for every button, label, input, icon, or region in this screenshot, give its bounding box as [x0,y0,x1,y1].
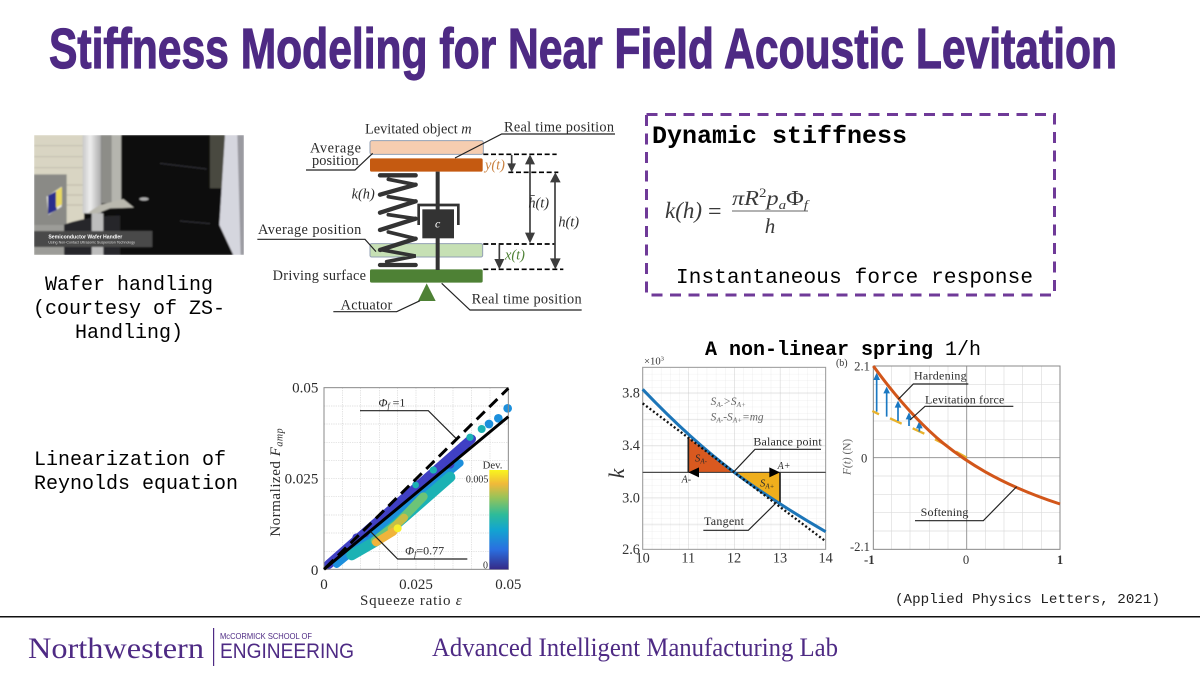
annotations: Balance point [753,434,822,448]
footer logo: Northwestern Engineering [28,628,354,666]
axis labels: 3.0 [622,490,640,506]
spring [380,175,416,265]
diagram labels: x(t) [504,247,525,263]
axis labels: 3.8 [622,385,640,401]
diagram labels: Average position [258,222,361,238]
caption: wafer handling: (courtesy of ZS- [33,298,225,321]
axis labels [604,356,833,566]
axis labels: 0.025 [285,472,318,488]
diagram labels: h(t) [558,215,579,231]
leader lines [257,134,615,312]
caption: linearization: Reynolds equation [34,473,238,496]
axis labels: (b) [836,358,848,369]
axis labels: 0 [861,451,867,465]
curves [643,389,826,541]
axis labels: 0.025 [399,577,433,593]
axis labels [836,358,1063,567]
annotations: =mg [742,412,764,424]
colorbar: 0.005 [466,474,488,485]
axis labels: Normalized F [268,447,284,537]
arrowheads [688,467,780,477]
annotations: -S [723,412,733,424]
axis labels: F(t) (N) [842,439,854,476]
chart: k tangent [604,356,833,566]
axis labels: ×10 [644,357,661,368]
annotations: >S [723,396,737,408]
phi annotations: f [414,549,418,558]
axis labels: 13 [773,550,787,566]
caption: instantaneous force response: Instantaneous force response [676,267,1033,290]
chart: normalized force vs squeeze ratio [268,380,521,609]
annotations [914,368,1004,519]
annotations: Tangent [704,514,745,528]
equation: k(h) [665,198,702,223]
diagram labels: h̄(t) [528,195,549,211]
caption: wafer handling: Wafer handling [45,274,213,297]
diagram labels: Real time position [504,120,614,136]
annotations: A+ [777,461,791,472]
diagram labels: Real time position [472,291,582,307]
diagram labels: y(t) [483,157,505,173]
discs [370,141,483,301]
leaders [703,449,821,530]
equation: h [765,214,775,238]
axis labels: 2.6 [622,542,640,558]
axis labels [268,380,521,609]
axis labels: 0.05 [495,577,521,593]
annotations [681,396,822,528]
heading: dynamic stiffness: Dynamic stiffness [652,122,907,151]
axis labels: 1 [1057,553,1063,567]
colorbar: 0 [483,560,488,571]
caption: linearization: Linearization of [34,449,226,472]
annotations: S [711,412,716,424]
chart heading: non-linear spring: A non-linear spring 1/h [705,339,981,362]
photo: wafer handler: Using Non-Contact Ultrasonic Suspension Technology [48,241,135,245]
linear force dashes [872,411,967,458]
panel: dynamic stiffness [646,114,1054,295]
diagram labels [258,120,614,313]
annotations: A- [681,474,691,485]
diagram labels: Actuator [341,297,393,313]
equation: p [764,186,779,210]
annotations: Hardening [914,368,967,382]
axis labels: -2.1 [850,540,870,554]
annotations: S [695,454,700,465]
phi annotations: f [387,402,391,411]
annotations: A+ [732,416,742,425]
annotations: Softening [921,505,968,519]
annotations: A+ [736,400,746,409]
caption: wafer handling: Handling) [75,322,183,345]
citation: (Applied Physics Letters, 2021) [895,592,1160,608]
axis labels: 2.1 [854,359,870,373]
axis labels: 14 [819,550,833,566]
annotations: A- [715,416,724,425]
diagram: mass-spring-damper model [257,120,615,313]
diagram labels: position [312,153,359,169]
dimension lines [483,154,563,269]
axis labels: 12 [727,550,741,566]
phi annotations [360,396,467,559]
axis labels: amp [275,428,286,447]
annotations: A- [715,400,724,409]
annotations: Levitation force [925,393,1004,407]
footer logo: Northwestern Engineering: McCORMICK SCHOOL OF [220,631,312,641]
axis labels: 3.4 [622,438,640,454]
axis labels: 0 [311,563,318,579]
fit lines [324,388,508,569]
axis labels: 3 [661,356,665,363]
annotations: S [760,479,765,490]
blue force arrows [873,373,923,432]
footer logo: Northwestern Engineering: Northwestern [28,632,204,665]
equation: Φ [786,186,804,210]
axis labels: Squeeze ratio ε [360,593,462,609]
phi annotations: Φ [378,396,387,410]
diagram labels: Levitated object m [365,121,472,137]
damper [419,172,458,270]
axis labels: 0 [320,577,328,593]
axis labels: 0 [963,553,969,567]
colorbar: Dev. [483,461,502,472]
annotations: A+ [764,483,775,491]
equation: a [779,197,787,212]
diagram labels: Driving surface [273,268,366,284]
chart: force curve [836,358,1063,567]
equation [665,185,811,238]
axis labels: k [604,467,629,478]
shaded areas [643,437,826,503]
colorbar [466,461,508,571]
axis labels: 10 [636,550,650,566]
dimension arrows [494,154,561,269]
diagram labels: k(h) [352,186,375,202]
phi annotations: =0.77 [416,543,444,557]
photo: wafer handler [34,135,244,255]
leaders [898,384,1017,521]
footer divider [0,616,1200,618]
equation: πR [732,186,759,210]
equation: = [708,199,722,225]
scatter points [329,404,512,564]
axis labels: 0.05 [292,380,318,396]
equation: f [804,197,811,212]
damper: c [435,216,441,230]
equation: 2 [759,185,766,200]
phi annotations: =1 [390,396,405,410]
force curve [873,366,1060,504]
photo: wafer handler: Semiconductor Wafer Handler [48,234,122,240]
annotations: S [711,396,716,408]
annotations: A- [699,458,708,466]
footer logo: Northwestern Engineering: ENGINEERING [220,640,354,663]
phi annotations: Φ [405,543,414,557]
diagram labels: Average [310,141,361,157]
axis labels: 11 [681,550,695,566]
axis labels: -1 [864,553,875,567]
footer lab name: Advanced Intelligent Manufacturing Lab [432,633,838,662]
